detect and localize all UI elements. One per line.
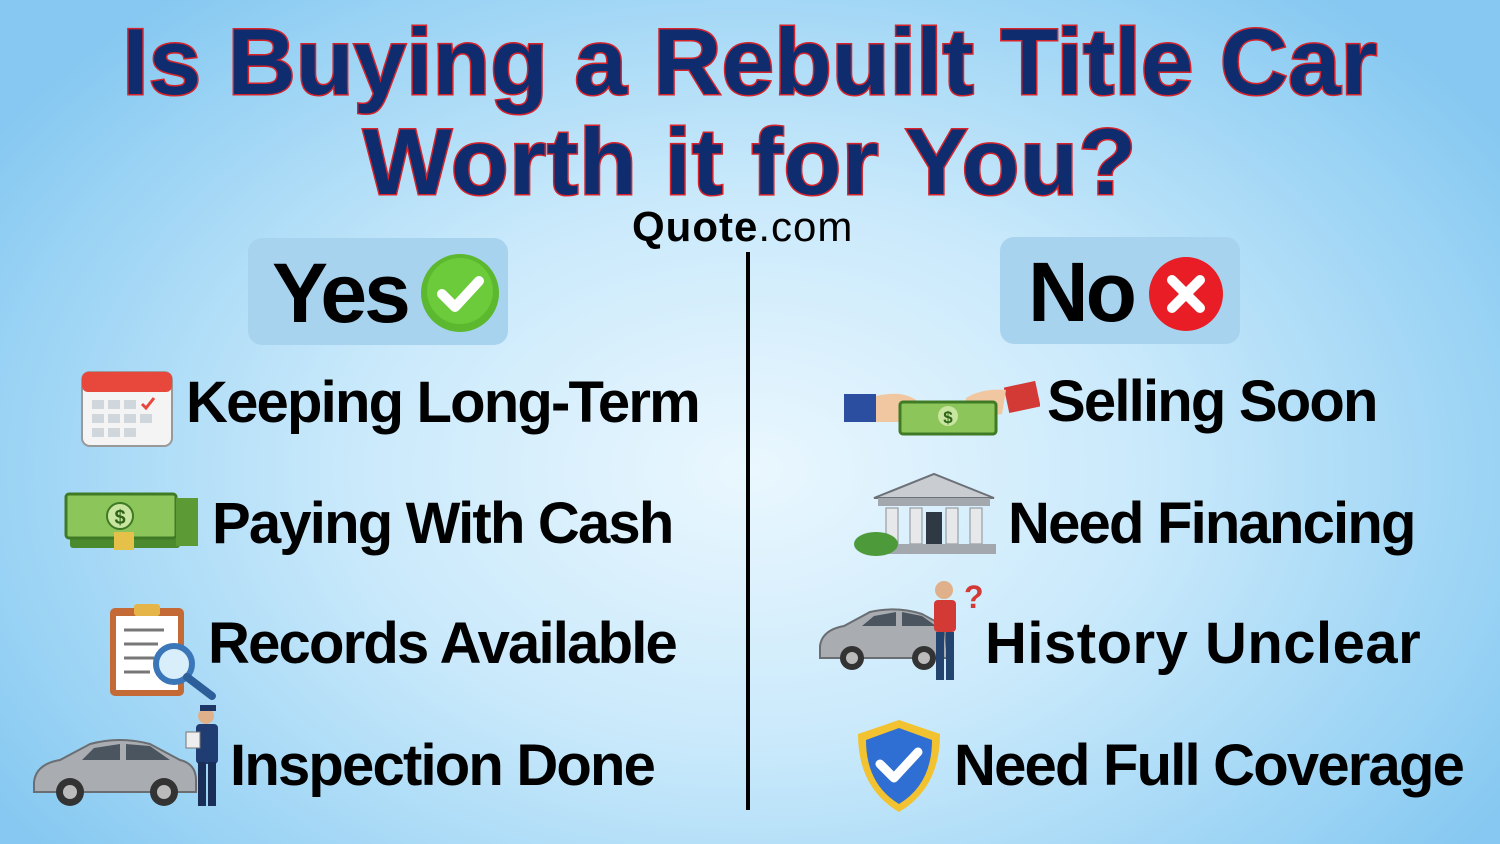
icon: car with confused man — [819, 579, 984, 680]
brand: Quote.com: Quote.com — [632, 203, 853, 250]
icon: bank — [854, 472, 996, 556]
panel: no header — [1000, 237, 1240, 344]
icon: cash stack: $ — [114, 507, 126, 529]
panel: no header: No — [1028, 245, 1134, 339]
center divider — [746, 252, 750, 810]
icon: cash stack — [64, 492, 198, 550]
icon: clipboard with magnifier — [110, 604, 216, 700]
icon: green check — [421, 254, 499, 332]
icon: calendar — [81, 371, 173, 447]
title line 1: Is Buying a Rebuilt Title Car — [122, 9, 1378, 114]
icon: shield check — [858, 720, 940, 812]
title line 2: Worth it for You? — [363, 109, 1137, 214]
icon: red x — [1149, 257, 1223, 331]
text: history unclear: History Unclear — [985, 611, 1421, 676]
text: keeping long-term: Keeping Long-Term — [186, 370, 699, 435]
icon: car with inspector — [33, 705, 218, 806]
icon: hands exchanging money — [844, 380, 1040, 436]
icon: hands exchanging money: $ — [943, 408, 953, 427]
text: need full coverage: Need Full Coverage — [954, 733, 1463, 798]
text: selling soon: Selling Soon — [1047, 369, 1377, 434]
panel: yes header — [248, 238, 508, 345]
text: paying with cash: Paying With Cash — [212, 491, 673, 556]
icon: car with confused man: ? — [964, 579, 984, 615]
panel: yes header: Yes — [272, 246, 408, 340]
text: inspection done: Inspection Done — [230, 733, 654, 798]
text: records available: Records Available — [208, 611, 676, 676]
text: need financing: Need Financing — [1008, 491, 1415, 556]
